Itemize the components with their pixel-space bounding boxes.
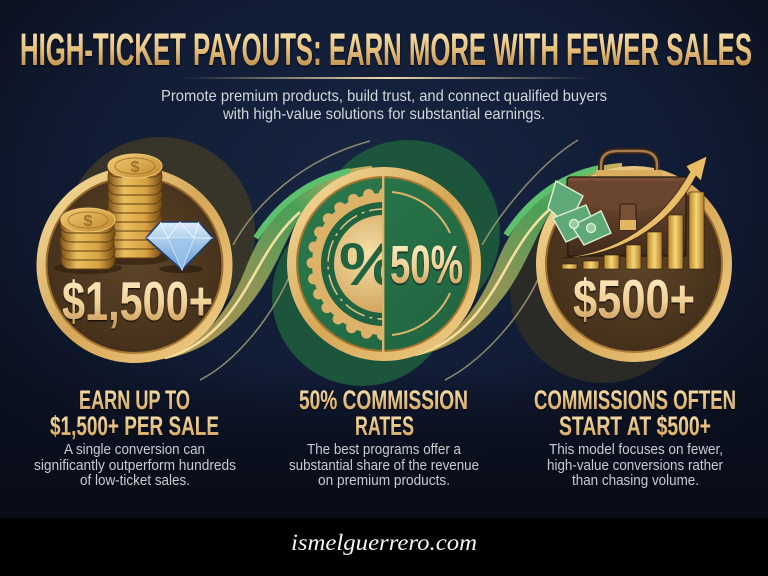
column 1 heading: EARN UP TO — [79, 385, 190, 415]
column 3 body: than chasing volume. — [572, 473, 699, 489]
column 1 body: A single conversion can — [64, 442, 205, 458]
green disc behind centre medallion — [272, 140, 500, 386]
column 1 heading — [50, 385, 219, 441]
subtitle: Promote premium products, build trust, and connect qualified buyers — [161, 88, 607, 105]
icon: short coin stack — [54, 208, 122, 274]
column 1 body: significantly outperform hundreds — [34, 458, 236, 474]
icon: tall coin stack: $ — [131, 159, 140, 176]
thin gold flowing lines — [200, 140, 578, 380]
column 2 heading: RATES — [355, 411, 414, 441]
medallion: $1,500+ — [36, 154, 232, 363]
column 2 body: substantial share of the revenue — [289, 458, 479, 474]
decorative right arcs — [392, 192, 450, 335]
disc shadow behind left medallion — [65, 137, 255, 327]
column 2 body — [289, 442, 479, 489]
icon: short coin stack: $ — [84, 213, 93, 230]
medallion: 50% commission — [287, 167, 481, 361]
column 2 body: The best programs offer a — [307, 442, 462, 458]
icon: diamond — [146, 222, 213, 273]
column 3 body — [547, 442, 723, 489]
vertical divider — [382, 176, 384, 352]
column 1 heading: $1,500+ PER SALE — [50, 411, 219, 441]
icon: tall coin stack — [101, 154, 169, 265]
column 1 body — [34, 442, 236, 489]
footer bar — [0, 518, 768, 576]
icon: briefcase — [567, 151, 686, 256]
ribbon connecting centre and right medallions — [390, 163, 622, 358]
column 3 body: high-value conversions rather — [547, 458, 723, 474]
medallion: $500+ — [536, 151, 732, 362]
value: $1,500+: $1,500+ — [62, 270, 213, 332]
subtitle — [161, 88, 607, 123]
subtitle: with high-value solutions for substantial earnings. — [222, 106, 545, 123]
icon: banknotes — [548, 181, 611, 245]
icon: scalloped percent badge half — [306, 188, 382, 340]
disc shadow behind right medallion — [510, 197, 696, 383]
column 2 heading — [299, 385, 468, 441]
footer website: ismelguerrero.com — [291, 530, 477, 555]
ribbon connecting left and centre medallions — [140, 166, 372, 361]
bar chart — [562, 192, 704, 269]
column 3 heading: START AT $500+ — [559, 411, 711, 441]
icon: scalloped percent badge half: % — [339, 231, 399, 298]
column 2 body: on premium products. — [318, 473, 450, 489]
column 3 body: This model focuses on fewer, — [549, 442, 723, 458]
lower background fade — [0, 370, 768, 518]
column 1 body: of low-ticket sales. — [80, 473, 190, 489]
arrow: rising trend — [563, 156, 707, 258]
column 3 heading — [534, 385, 736, 441]
column 2 heading: 50% COMMISSION — [299, 385, 468, 415]
value: 50%: 50% — [390, 235, 463, 295]
value: $500+: $500+ — [573, 268, 695, 330]
title divider — [181, 77, 593, 79]
